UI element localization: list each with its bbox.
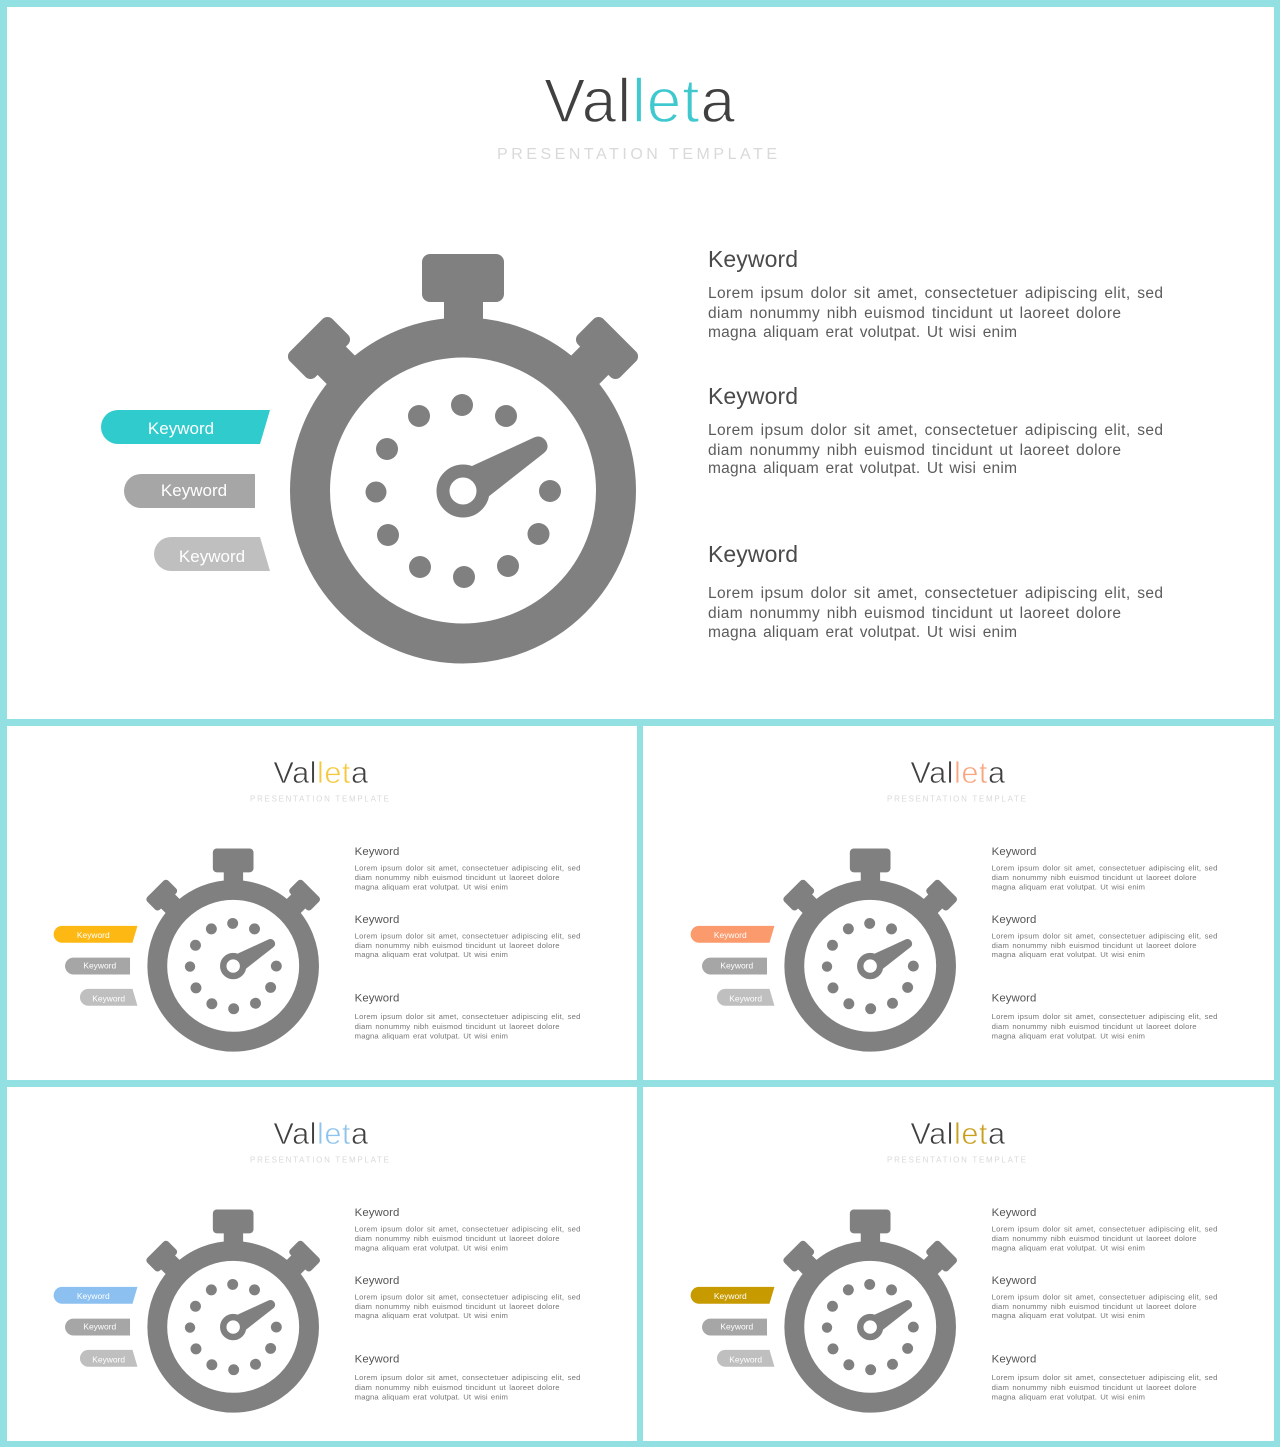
panel: yellow slide [7,726,637,1080]
text block 3 [992,992,1217,1040]
text block 2 [355,1275,580,1320]
text block 1: Keyword [708,246,798,272]
text block 1: Lorem ipsum dolor sit amet, consectetuer adipiscing elit, sed [992,863,1217,872]
text block 3: Lorem ipsum dolor sit amet, consectetuer adipiscing elit, sed [355,1373,580,1382]
title: Valleta [910,1116,1006,1151]
text block 2: Keyword [708,383,798,409]
text block 1: magna aliquam erat volutpat. Ut wisi enim [355,1244,508,1253]
tag: keyword light gray [717,989,774,1006]
text block 3 [992,1353,1217,1401]
text block 2: magna aliquam erat volutpat. Ut wisi enim [992,1311,1145,1320]
text block 3: magna aliquam erat volutpat. Ut wisi enim [992,1031,1145,1040]
text block 2: magna aliquam erat volutpat. Ut wisi enim [992,950,1145,959]
panel: blue slide [7,1087,637,1441]
tag: keyword gray: Keyword [720,961,753,971]
icon: stopwatch [145,849,321,1042]
tag: keyword light gray: Keyword [92,993,125,1003]
text block 3: magna aliquam erat volutpat. Ut wisi enim [708,624,1017,641]
text block 2: Lorem ipsum dolor sit amet, consectetuer adipiscing elit, sed [708,422,1163,439]
text block 1: diam nonummy nibh euismod tincidunt ut laoreet dolore [992,873,1197,882]
tag: keyword light gray [154,537,270,571]
text block 2: Keyword [992,914,1036,926]
text block 2: Lorem ipsum dolor sit amet, consectetuer adipiscing elit, sed [355,1292,580,1301]
tag: keyword gray [65,958,130,974]
text block 3: diam nonummy nibh euismod tincidunt ut laoreet dolore [992,1383,1197,1392]
text block 1: Keyword [355,846,399,858]
panel: orange slide [643,726,1274,1080]
title: Valleta [273,1116,369,1151]
panel: main slide [7,7,1274,719]
text block 3: diam nonummy nibh euismod tincidunt ut laoreet dolore [992,1022,1197,1031]
text block 3: magna aliquam erat volutpat. Ut wisi enim [355,1392,508,1401]
tag: keyword yellow [54,926,137,943]
tag: keyword blue: Keyword [77,1291,110,1301]
text block 1: diam nonummy nibh euismod tincidunt ut laoreet dolore [355,1234,560,1243]
text block 1: Keyword [992,846,1036,858]
subtitle: PRESENTATION TEMPLATE [887,794,1026,803]
text block 3: Keyword [355,992,399,1004]
text block 1: diam nonummy nibh euismod tincidunt ut laoreet dolore [992,1234,1197,1243]
panel: gold slide [643,1087,1274,1441]
tag: keyword gray [702,958,767,974]
icon: stopwatch [285,254,641,644]
text block 2: Lorem ipsum dolor sit amet, consectetuer adipiscing elit, sed [992,1292,1217,1301]
text block 2: diam nonummy nibh euismod tincidunt ut laoreet dolore [355,941,560,950]
tag: keyword light gray: Keyword [179,547,245,566]
tag: keyword blue [54,1287,137,1304]
text block 1: magna aliquam erat volutpat. Ut wisi enim [992,1244,1145,1253]
text block 1: magna aliquam erat volutpat. Ut wisi enim [355,883,508,892]
text block 3: Lorem ipsum dolor sit amet, consectetuer adipiscing elit, sed [992,1373,1217,1382]
subtitle: PRESENTATION TEMPLATE [497,146,777,163]
tag: keyword gray [65,1319,130,1335]
text block 2: Keyword [992,1275,1036,1287]
text block 1: magna aliquam erat volutpat. Ut wisi enim [708,324,1017,341]
text block 1: Lorem ipsum dolor sit amet, consectetuer adipiscing elit, sed [708,285,1163,302]
text block 3: Keyword [708,541,798,567]
text block 3: Lorem ipsum dolor sit amet, consectetuer adipiscing elit, sed [992,1012,1217,1021]
text block 2: diam nonummy nibh euismod tincidunt ut laoreet dolore [708,442,1121,459]
text block 2: Lorem ipsum dolor sit amet, consectetuer adipiscing elit, sed [992,931,1217,940]
text block 2: magna aliquam erat volutpat. Ut wisi enim [355,950,508,959]
text block 2 [708,383,1163,477]
tag: keyword light gray: Keyword [92,1354,125,1364]
tag: keyword gray: Keyword [83,961,116,971]
tag: keyword light gray [80,1350,137,1367]
text block 3 [355,992,580,1040]
tag: keyword light gray: Keyword [729,993,762,1003]
text block 1: magna aliquam erat volutpat. Ut wisi enim [992,883,1145,892]
tag: keyword gray: Keyword [83,1322,116,1332]
text block 2: diam nonummy nibh euismod tincidunt ut laoreet dolore [992,941,1197,950]
text block 1 [355,846,580,892]
tag: keyword gray: Keyword [161,481,227,500]
text block 3 [708,541,1163,641]
text block 2 [992,1275,1217,1320]
tag: keyword orange: Keyword [714,930,747,940]
subtitle: PRESENTATION TEMPLATE [250,1155,389,1164]
tag: keyword light gray: Keyword [729,1354,762,1364]
tag: keyword orange [691,926,774,943]
text block 2 [992,914,1217,959]
text block 1: Lorem ipsum dolor sit amet, consectetuer adipiscing elit, sed [992,1224,1217,1233]
text block 3: magna aliquam erat volutpat. Ut wisi enim [992,1392,1145,1401]
text block 2: magna aliquam erat volutpat. Ut wisi enim [355,1311,508,1320]
text block 1: Keyword [355,1207,399,1219]
text block 2: magna aliquam erat volutpat. Ut wisi enim [708,460,1017,477]
text block 3: Keyword [992,992,1036,1004]
tag: keyword gray [124,474,255,508]
text block 2: Keyword [355,1275,399,1287]
tag: keyword teal [101,410,270,444]
tag: keyword gray: Keyword [720,1322,753,1332]
tag: keyword yellow: Keyword [77,930,110,940]
icon: stopwatch [145,1210,321,1403]
text block 1 [992,846,1217,892]
text block 1: Keyword [992,1207,1036,1219]
text block 2 [355,914,580,959]
text block 1 [355,1207,580,1253]
text block 1: diam nonummy nibh euismod tincidunt ut laoreet dolore [355,873,560,882]
text block 3 [355,1353,580,1401]
icon: stopwatch [782,1210,958,1403]
tag: keyword teal: Keyword [148,419,214,438]
subtitle: PRESENTATION TEMPLATE [250,794,389,803]
text block 3: Lorem ipsum dolor sit amet, consectetuer adipiscing elit, sed [355,1012,580,1021]
tag: keyword light gray [80,989,137,1006]
tag: keyword gold [691,1287,774,1304]
title: Valleta [910,755,1006,790]
text block 1: diam nonummy nibh euismod tincidunt ut laoreet dolore [708,305,1121,322]
text block 3: Keyword [355,1353,399,1365]
text block 2: Keyword [355,914,399,926]
text block 1 [992,1207,1217,1253]
text block 3: diam nonummy nibh euismod tincidunt ut laoreet dolore [355,1022,560,1031]
tag: keyword gray [702,1319,767,1335]
tag: keyword light gray [717,1350,774,1367]
title: Valleta [273,755,369,790]
title: Valleta [544,67,736,136]
text block 3: Keyword [992,1353,1036,1365]
icon: stopwatch [782,849,958,1042]
text block 1 [708,246,1163,341]
text block 3: diam nonummy nibh euismod tincidunt ut laoreet dolore [708,605,1121,622]
tag: keyword gold: Keyword [714,1291,747,1301]
text block 1: Lorem ipsum dolor sit amet, consectetuer adipiscing elit, sed [355,863,580,872]
text block 1: Lorem ipsum dolor sit amet, consectetuer adipiscing elit, sed [355,1224,580,1233]
text block 3: diam nonummy nibh euismod tincidunt ut laoreet dolore [355,1383,560,1392]
text block 3: magna aliquam erat volutpat. Ut wisi enim [355,1031,508,1040]
text block 2: Lorem ipsum dolor sit amet, consectetuer adipiscing elit, sed [355,931,580,940]
text block 2: diam nonummy nibh euismod tincidunt ut laoreet dolore [355,1302,560,1311]
text block 3: Lorem ipsum dolor sit amet, consectetuer adipiscing elit, sed [708,585,1163,602]
subtitle: PRESENTATION TEMPLATE [887,1155,1026,1164]
text block 2: diam nonummy nibh euismod tincidunt ut laoreet dolore [992,1302,1197,1311]
